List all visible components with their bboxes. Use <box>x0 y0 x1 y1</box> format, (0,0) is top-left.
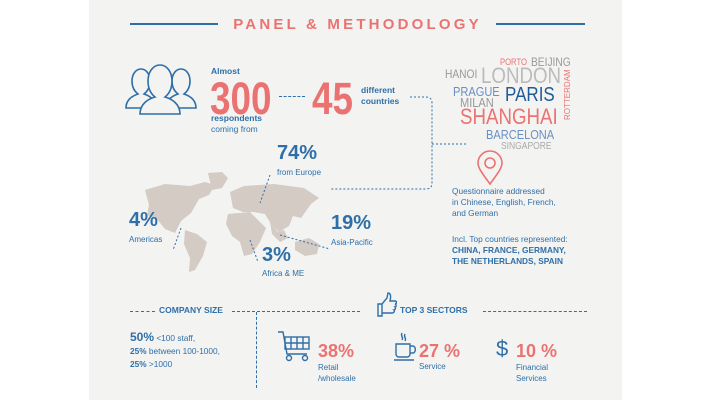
text: questionnaire: Questionnaire addressed <box>452 186 545 196</box>
sector: retail <box>278 331 356 383</box>
stat: 3% Africa: 3% <box>262 244 291 266</box>
heading: top 3 sectors: TOP 3 SECTORS <box>400 305 468 315</box>
word cloud: SHANGHAI <box>460 104 558 129</box>
stat: 3% Africa: Africa & ME <box>262 269 304 278</box>
title: PANEL & METHODOLOGY <box>233 16 482 33</box>
word cloud: ROTTERDAM <box>563 70 572 120</box>
stat: 4% Americas: 4% <box>129 209 158 231</box>
dotted connector <box>331 96 466 190</box>
word cloud: BEIJING <box>531 55 571 69</box>
stat: 45 countries <box>312 73 399 124</box>
icon: people <box>125 64 197 115</box>
sector: retail: 38% <box>318 341 354 361</box>
text: questionnaire: and German <box>452 208 498 218</box>
sector: service: Service <box>419 362 446 371</box>
word cloud: PRAGUE <box>453 84 500 99</box>
word cloud: BARCELONA <box>486 127 554 142</box>
sector: service: 27 % <box>419 341 460 361</box>
text: top countries <box>452 234 568 266</box>
word cloud: SINGAPORE <box>501 141 552 152</box>
sector: financial: 10 % <box>516 341 557 361</box>
sector: financial: Services <box>516 374 547 383</box>
word cloud: LONDON <box>481 63 561 88</box>
sector: financial: $ <box>496 336 508 361</box>
stat: 4% Americas <box>129 209 162 244</box>
text: top countries: Incl. Top countries represented: <box>452 234 568 244</box>
stat: 45 countries: different <box>361 85 395 95</box>
text: top countries: THE NETHERLANDS, SPAIN <box>452 256 563 266</box>
stat: 74% Europe: 74% <box>277 142 317 164</box>
leader lines <box>173 175 328 261</box>
stat: 19% Asia-Pacific <box>331 212 373 247</box>
icon: location pin <box>477 150 503 186</box>
stat: 3% Africa <box>262 244 304 278</box>
stat: 300 respondents: 300 <box>210 73 272 124</box>
sector: financial <box>496 336 557 383</box>
word cloud: PORTO <box>500 57 527 67</box>
icon: thumbs up <box>377 292 397 317</box>
stat: 300 respondents: coming from <box>211 124 258 134</box>
heading: company size: COMPANY SIZE <box>159 305 223 315</box>
stat: 19% Asia-Pacific: Asia-Pacific <box>331 238 373 247</box>
sector: retail: /wholesale <box>318 374 356 383</box>
text: company size breakdown <box>130 330 220 369</box>
world map <box>145 172 319 272</box>
word cloud: MILAN <box>460 95 494 110</box>
text: company size breakdown: 50% <100 staff, <box>130 330 195 344</box>
sector: service <box>394 332 460 371</box>
stat: 74% Europe <box>277 142 321 177</box>
sector: retail: Retail <box>318 363 338 372</box>
stat: 300 respondents: Almost <box>211 66 240 76</box>
stat: 45 countries: 45 <box>312 73 353 124</box>
word cloud <box>445 55 572 152</box>
text: questionnaire <box>452 186 556 218</box>
text: questionnaire: in Chinese, English, French, <box>452 197 556 207</box>
word cloud: HANOI <box>445 67 477 81</box>
stat: 300 respondents: respondents <box>211 113 262 123</box>
stat: 19% Asia-Pacific: 19% <box>331 212 371 234</box>
stat: 74% Europe: from Europe <box>277 168 321 177</box>
sector: financial: Financial <box>516 363 548 372</box>
text: company size breakdown: 25% between 100-1000, <box>130 346 220 356</box>
word cloud: PARIS <box>505 84 555 106</box>
stat: 45 countries: countries <box>361 96 399 106</box>
stat: 4% Americas: Americas <box>129 235 162 244</box>
text: company size breakdown: 25% >1000 <box>130 359 172 369</box>
text: top countries: CHINA, FRANCE, GERMANY, <box>452 245 566 255</box>
